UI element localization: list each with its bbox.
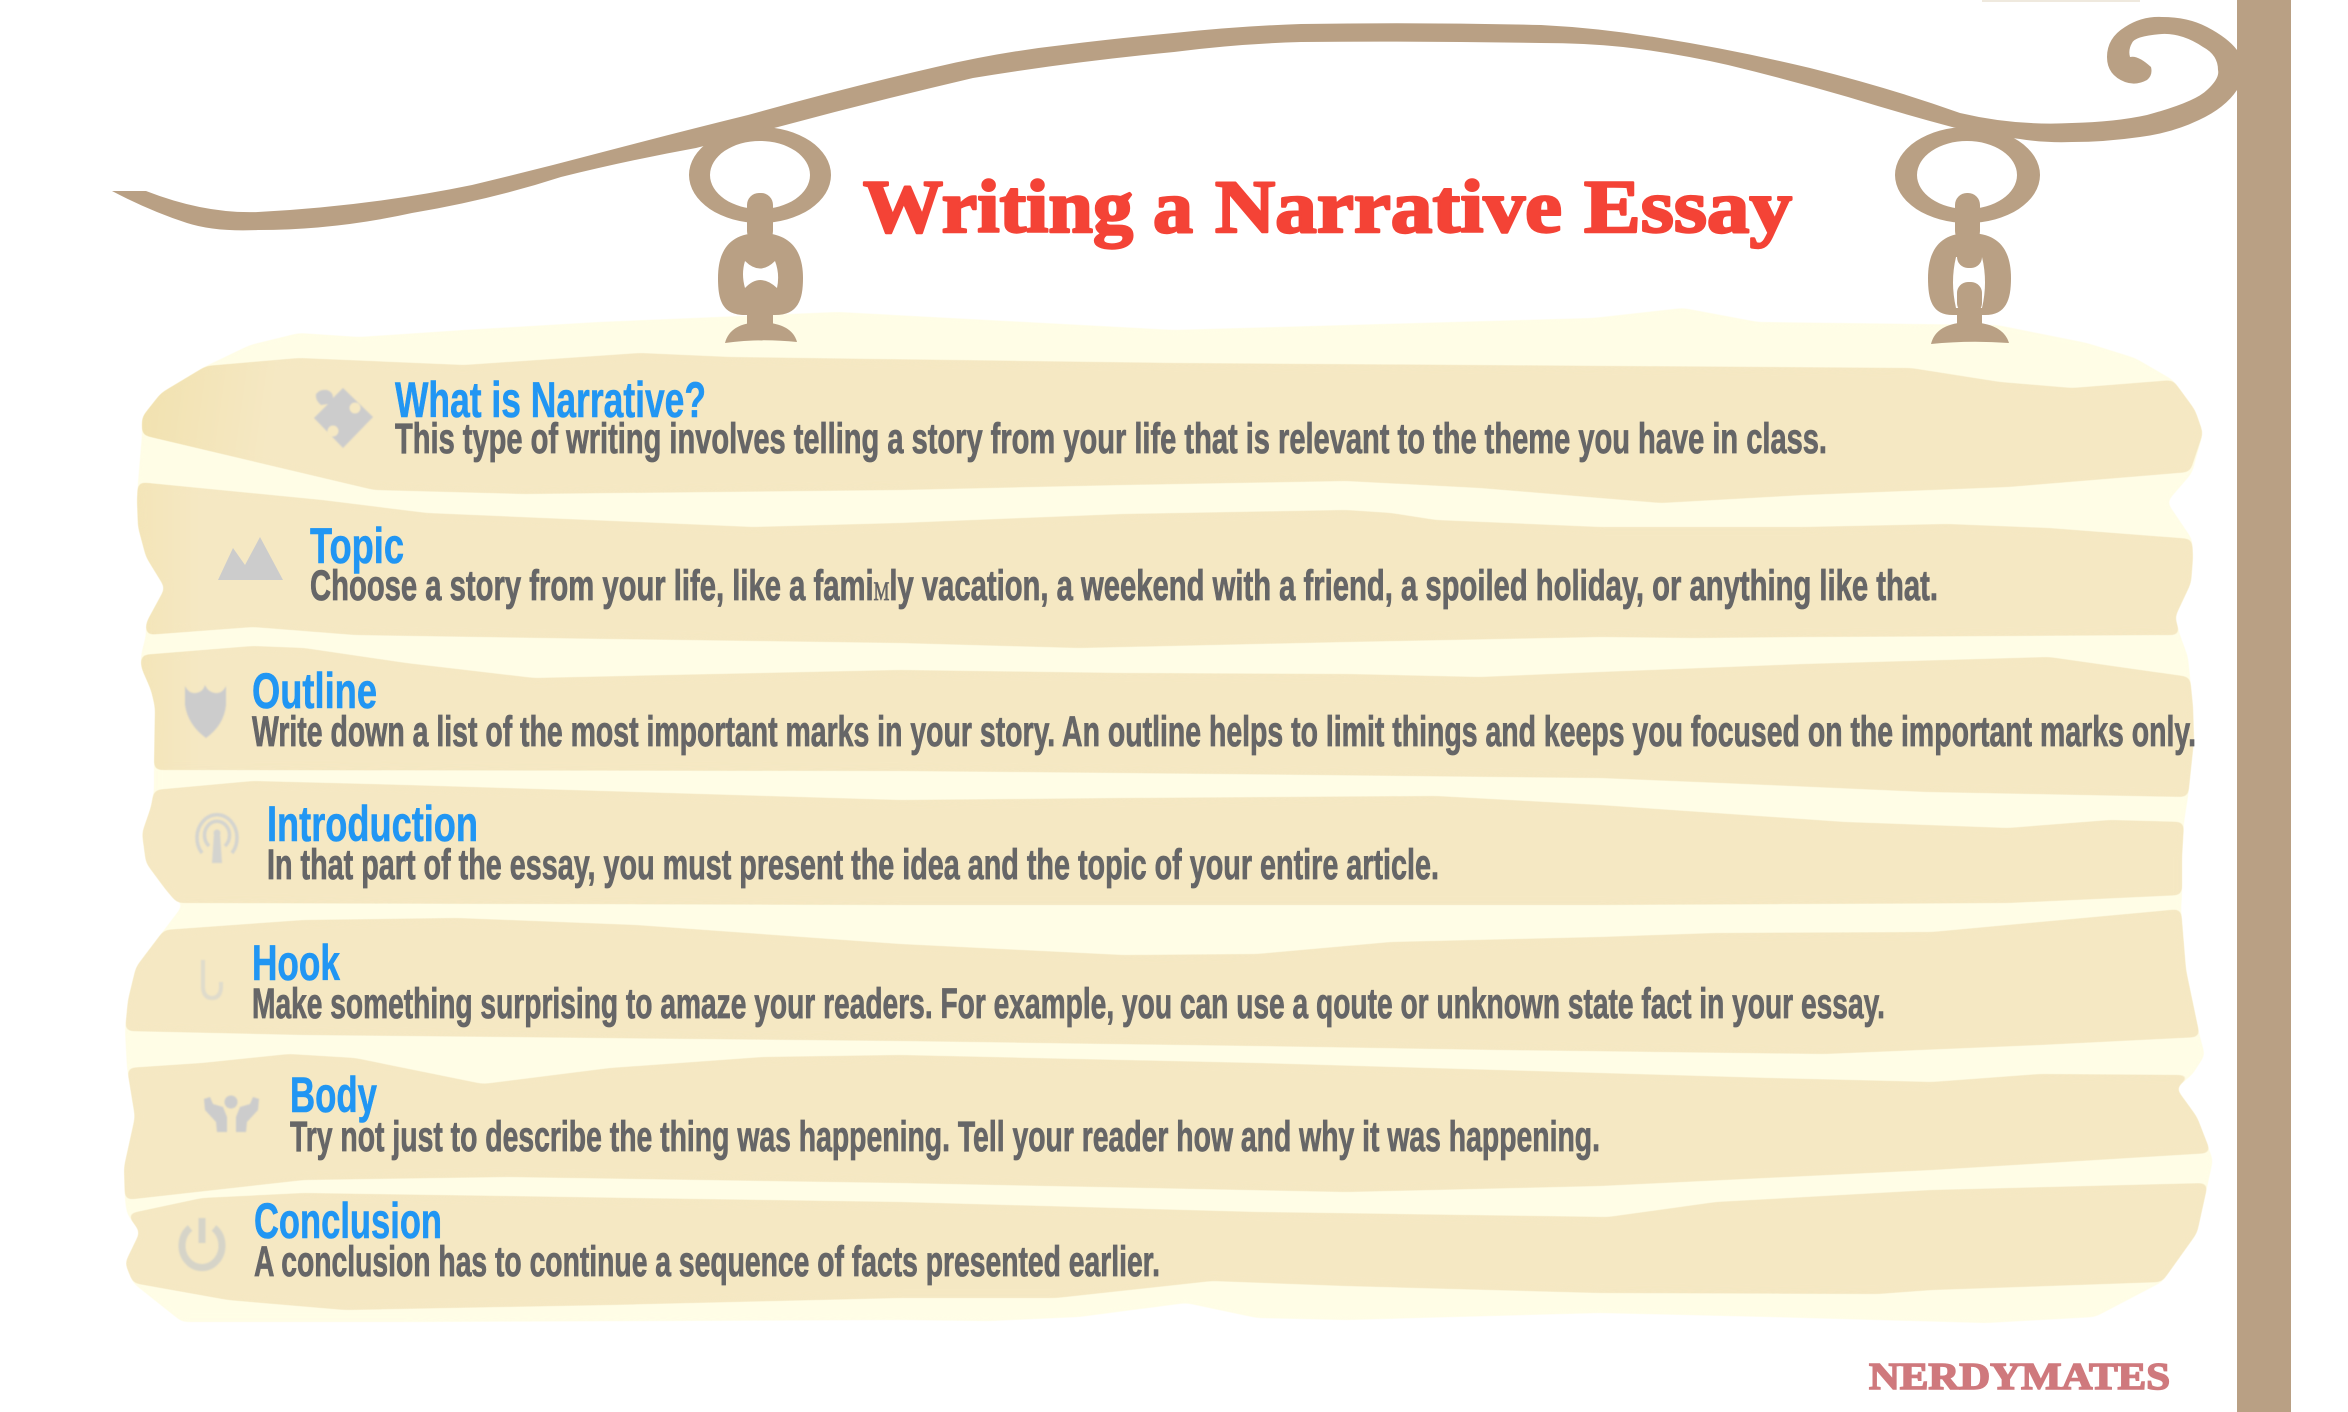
body text: In that part of the essay, you must present the idea and the topic of your entire article. xyxy=(267,841,1439,889)
item: What is Narrative? xyxy=(314,372,1827,463)
heading: What is Narrative? xyxy=(395,372,706,428)
plank 4 xyxy=(142,781,2184,905)
icon: puzzle piece xyxy=(314,388,373,448)
left ring xyxy=(689,127,831,223)
heading: Body xyxy=(290,1067,377,1123)
plank 6 xyxy=(124,1054,2211,1200)
item: Body xyxy=(204,1067,1600,1161)
right ring xyxy=(1895,127,2040,223)
icon: mountains xyxy=(218,537,283,580)
board background xyxy=(124,308,2213,1323)
left chain link xyxy=(718,193,803,343)
signpost: vertical post xyxy=(2237,0,2291,1412)
signpost: curved arm with scroll xyxy=(112,17,2237,230)
item: Outline xyxy=(185,663,2196,756)
item: Conclusion xyxy=(182,1193,1160,1286)
plank 3 xyxy=(141,646,2194,797)
body text: A conclusion has to continue a sequence of facts presented earlier. xyxy=(254,1238,1160,1286)
heading: Hook xyxy=(252,935,340,991)
heading: Topic xyxy=(310,518,404,574)
icon: antenna xyxy=(197,815,237,863)
icon: raised hands xyxy=(204,1096,259,1132)
icon: hook xyxy=(203,960,221,998)
title: a xyxy=(1153,166,1193,249)
brand credit: NERDYMATES xyxy=(1869,1356,2170,1398)
heading: Outline xyxy=(252,663,377,719)
item: Hook xyxy=(203,935,1885,1028)
body text: Try not just to describe the thing was happening. Tell your reader how and why it was happening. xyxy=(290,1113,1600,1161)
heading: Conclusion xyxy=(254,1193,442,1249)
item: Introduction xyxy=(197,796,1439,889)
heading: Introduction xyxy=(267,796,478,852)
right chain link xyxy=(1928,193,2011,344)
top edge strip xyxy=(1982,0,2140,2)
title: Narrative xyxy=(1215,166,1562,249)
title: Essay xyxy=(1584,166,1792,249)
item: Topic xyxy=(218,518,1938,610)
title xyxy=(863,166,1792,249)
sign board xyxy=(124,308,2213,1323)
title: Writing xyxy=(863,166,1133,249)
plank 5 xyxy=(125,909,2200,1054)
icon: shield xyxy=(185,685,226,738)
plank 1 xyxy=(142,353,2203,503)
icon: power symbol xyxy=(182,1218,222,1268)
plank 2 xyxy=(137,482,2193,648)
plank 7 xyxy=(125,1183,2208,1310)
